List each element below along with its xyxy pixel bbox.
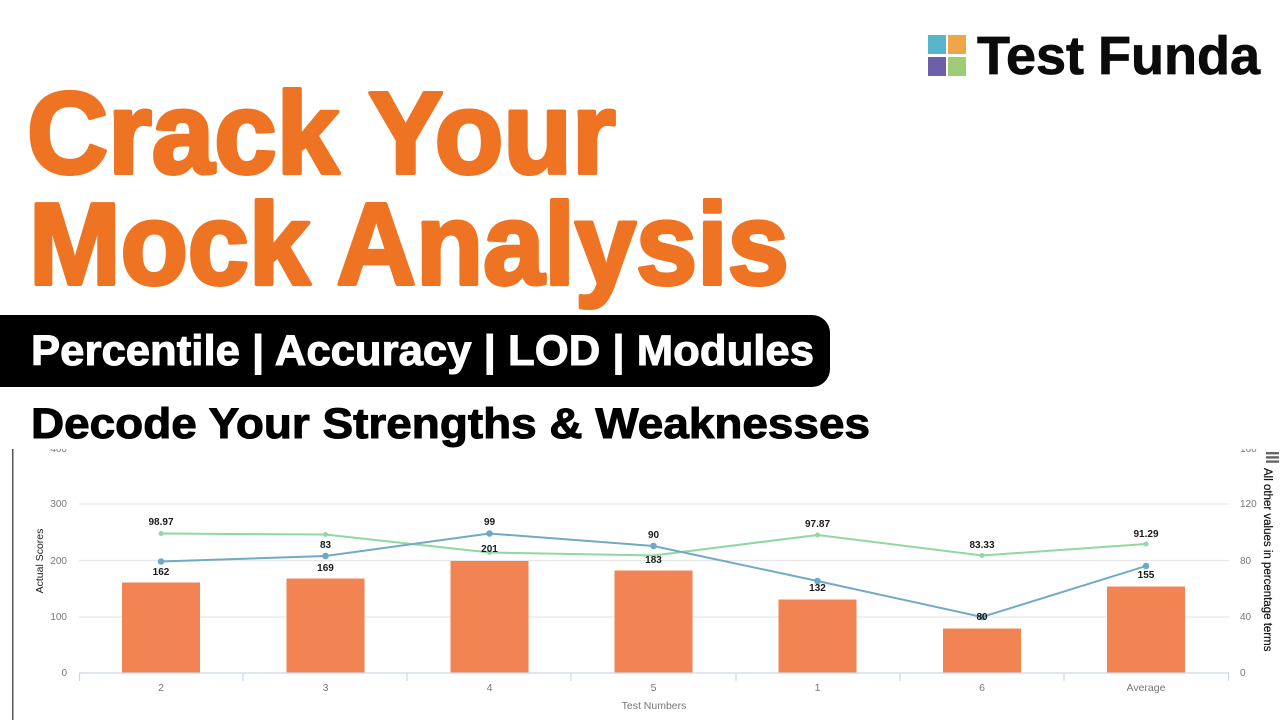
icon: chart menu — [1266, 452, 1279, 463]
left axis labels — [50, 444, 67, 679]
right axis title: All other values in percentage terms — [1261, 468, 1273, 652]
x axis category labels: 1 — [815, 682, 821, 694]
x axis category labels: 6 — [979, 682, 985, 694]
logo: Test Funda — [928, 26, 1261, 86]
chart left border — [12, 449, 14, 720]
data labels: 155 — [1138, 570, 1155, 581]
right axis labels: 80 — [1240, 556, 1252, 567]
bars: actual scores — [122, 561, 1185, 673]
x axis title: Test Numbers — [622, 700, 686, 712]
data labels: 83.33 — [969, 540, 995, 551]
logo wordmark: Funda — [1098, 26, 1261, 86]
data labels: 169 — [317, 563, 334, 574]
icon: four colour squares — [928, 35, 966, 76]
banner: metrics: Percentile | Accuracy | LOD | Modules — [31, 327, 814, 375]
data labels: 83 — [320, 540, 331, 551]
left axis labels: 300 — [50, 499, 67, 510]
x axis category labels: 2 — [158, 682, 164, 694]
data labels: 80 — [976, 612, 988, 623]
data labels: 91.29 — [1133, 529, 1159, 540]
left axis labels: 400 — [50, 444, 67, 455]
title: Crack Your — [27, 69, 616, 198]
x axis category labels: Average — [1127, 682, 1166, 694]
data labels: 90 — [648, 530, 659, 541]
left axis labels: 200 — [50, 556, 67, 567]
chart: scores by test — [12, 444, 1279, 720]
data labels: 162 — [153, 567, 170, 578]
x axis category labels: 3 — [323, 682, 329, 694]
x axis category labels: 4 — [487, 682, 493, 694]
data labels: 183 — [645, 555, 662, 566]
line series: blue — [158, 530, 1149, 620]
data labels: 201 — [481, 544, 498, 555]
data labels — [148, 517, 1159, 623]
logo wordmark — [977, 26, 1261, 86]
data labels: 98.97 — [148, 517, 174, 528]
right axis labels: 160 — [1240, 444, 1257, 455]
data labels: 99 — [484, 517, 495, 528]
subtitle: Decode Your Strengths & Weaknesses — [31, 400, 870, 448]
x axis category labels — [158, 682, 1166, 694]
data labels: 132 — [809, 583, 826, 594]
logo wordmark: Test — [977, 26, 1084, 86]
grid lines — [79, 504, 1229, 617]
line series: green — [158, 531, 1148, 558]
left axis labels: 0 — [61, 668, 67, 679]
title: Mock Analysis — [29, 179, 789, 309]
data labels: 97.87 — [805, 519, 830, 530]
left axis title: Actual Scores — [34, 529, 46, 593]
right axis labels: 40 — [1240, 612, 1252, 623]
right axis labels: 0 — [1240, 668, 1246, 679]
x axis category labels: 5 — [651, 682, 657, 694]
right axis labels — [1240, 444, 1257, 679]
title — [27, 69, 789, 309]
left axis labels: 100 — [50, 612, 67, 623]
banner: metrics — [0, 315, 830, 387]
right axis labels: 120 — [1240, 499, 1257, 510]
x axis — [79, 673, 1229, 681]
